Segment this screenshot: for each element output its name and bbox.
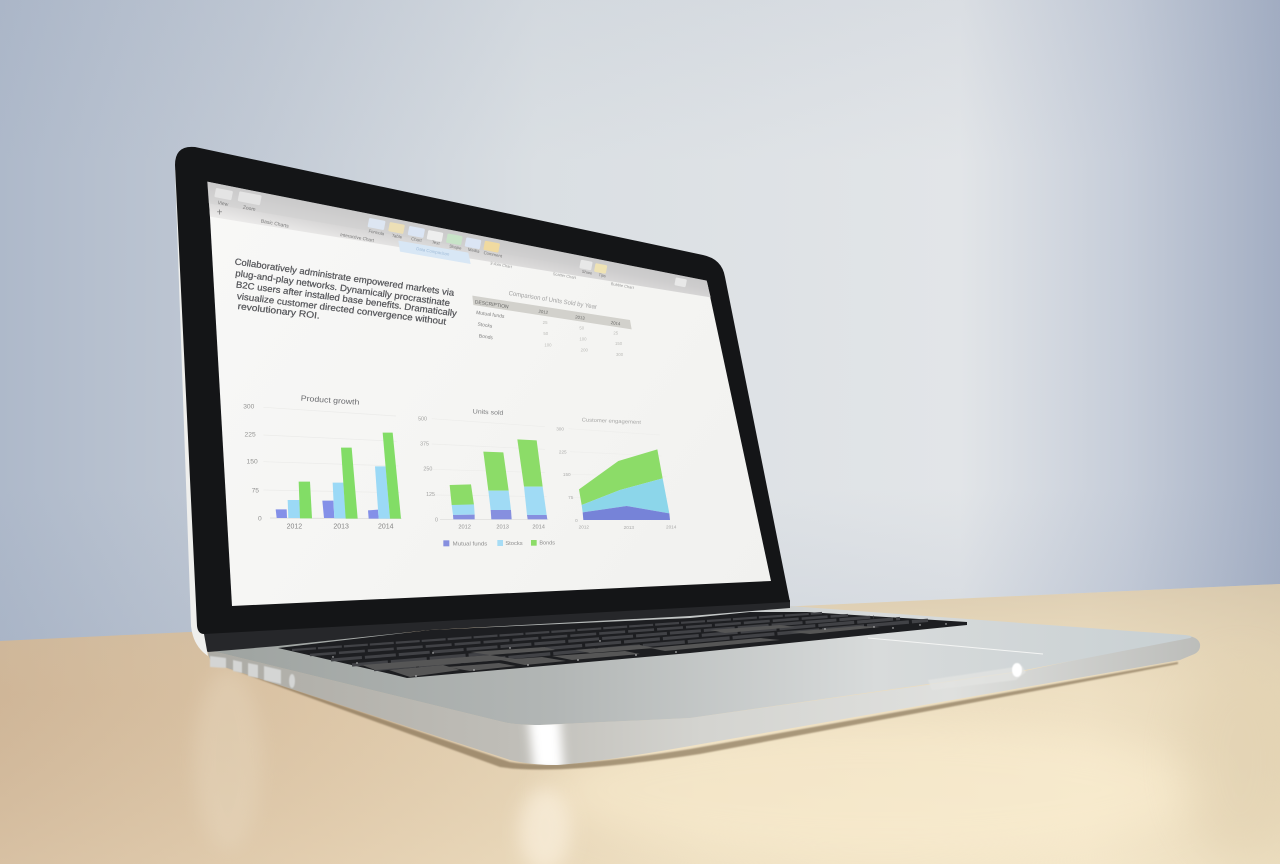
y axis labels: 125 <box>426 492 435 498</box>
key well <box>278 612 967 678</box>
toolbar labels: Zoom <box>242 205 256 213</box>
toolbar labels: Formula <box>368 228 385 236</box>
x axis labels: 2014 <box>378 524 394 531</box>
sheet tabs: Basic Charts <box>260 218 290 230</box>
table header labels: 2014 <box>611 320 621 326</box>
chart title: Units sold <box>473 408 504 417</box>
x axis labels: 2012 <box>458 525 471 531</box>
comparison table: 200 <box>581 347 588 352</box>
x axis labels: 2013 <box>333 524 349 531</box>
laptop <box>175 147 1200 772</box>
body paragraph: revolutionary ROI. <box>237 301 320 321</box>
hinge <box>200 600 790 652</box>
lid silver edge <box>175 170 208 656</box>
y axis labels: 225 <box>559 449 567 454</box>
body paragraph: plug-and-play networks. Dynamically procrastinate <box>235 268 451 308</box>
x axis labels: 2012 <box>579 524 589 529</box>
comparison table: 300 <box>616 352 624 357</box>
key glints <box>332 623 947 677</box>
bars <box>276 509 287 518</box>
toolbar labels: Media <box>467 247 481 254</box>
chart: Product growth <box>243 394 402 531</box>
comparison table: 100 <box>579 336 587 341</box>
toolbar labels <box>217 200 606 278</box>
sheet tabs: Bubble Chart <box>610 281 635 290</box>
keyboard <box>278 612 967 678</box>
y axis labels <box>556 427 578 523</box>
legend: Bonds <box>539 541 555 547</box>
key rows <box>292 613 928 670</box>
body paragraph: visualize customer directed convergence without <box>236 291 447 327</box>
legend: Stocks <box>505 541 523 547</box>
laptop base top deck <box>208 606 1192 725</box>
active sheet tab <box>398 241 471 264</box>
table header labels: 2012 <box>538 309 549 315</box>
stacked bars <box>450 484 474 505</box>
comparison table: 25 <box>543 320 548 325</box>
y axis labels: 250 <box>423 467 432 473</box>
y axis labels: 0 <box>575 518 578 523</box>
x axis labels: 2014 <box>666 525 677 530</box>
plus button: + <box>217 208 223 219</box>
sheet tabs: Data Comparison <box>416 246 450 257</box>
comparison table: 50 <box>543 331 549 336</box>
laptop base edge <box>208 636 1200 765</box>
comparison table <box>472 290 632 357</box>
table rows: Mutual funds <box>476 310 505 320</box>
screen <box>207 182 771 606</box>
sheet tabs: Interactive Chart <box>340 232 375 243</box>
charts <box>243 394 677 548</box>
comparison table: 100 <box>544 342 552 347</box>
table header band <box>472 296 632 329</box>
x axis labels: 2014 <box>532 525 545 531</box>
table header labels: 2013 <box>575 314 586 321</box>
body paragraph: B2C users after installed base benefits. Dramatically <box>235 279 458 318</box>
x axis labels: 2012 <box>287 524 302 531</box>
gridlines <box>263 407 402 519</box>
front keys <box>362 625 880 677</box>
trackpad highlight <box>868 638 1043 690</box>
legend: Mutual funds <box>453 542 487 548</box>
stacked areas <box>579 449 663 505</box>
y axis labels: 150 <box>247 459 258 466</box>
chart title: Customer engagement <box>582 417 642 426</box>
x axis labels <box>579 524 677 530</box>
y axis labels: 0 <box>435 517 438 523</box>
toolbar labels: Text <box>431 239 441 246</box>
table rows: Bonds <box>478 333 494 341</box>
y axis labels: 75 <box>252 487 259 494</box>
table title: Comparison of Units Sold by Year <box>508 290 597 311</box>
x axis labels <box>287 524 394 531</box>
x axis labels: 2013 <box>496 525 509 531</box>
comparison table: 50 <box>579 325 585 330</box>
body paragraph: Collaboratively administrate empowered markets via <box>234 256 455 298</box>
toolbar labels: Shape <box>449 243 463 251</box>
comparison table: 25 <box>613 331 619 336</box>
lid bezel <box>175 147 790 634</box>
toolbar buttons <box>214 188 687 287</box>
sheet tabs: 3-Axis Chart <box>490 260 513 269</box>
y axis labels: 375 <box>420 442 429 448</box>
background: wall <box>0 0 1280 650</box>
y axis labels <box>243 404 262 523</box>
chart: Units sold <box>418 408 555 548</box>
table header labels <box>474 299 621 326</box>
sheet tabs: Scatter Chart <box>552 271 577 280</box>
x axis labels <box>458 525 545 531</box>
sheet tabs <box>260 218 635 290</box>
table rows: Stocks <box>477 322 493 330</box>
chart title: Product growth <box>301 394 360 407</box>
y axis labels: 150 <box>563 472 571 477</box>
y axis labels: 300 <box>243 404 255 411</box>
toolbar labels: View <box>217 200 229 208</box>
background: wooden desk <box>0 584 1280 864</box>
front corner highlight <box>528 716 564 772</box>
table rows <box>476 310 505 341</box>
y axis labels: 225 <box>245 431 256 438</box>
y axis labels: 500 <box>418 417 427 423</box>
gridlines <box>568 429 668 498</box>
body paragraph <box>234 256 458 327</box>
table header labels: DESCRIPTION <box>474 299 509 310</box>
laptop shadow on desk <box>212 662 1178 770</box>
toolbar labels: Table <box>391 233 403 240</box>
ports on left side <box>210 656 295 688</box>
toolbar labels: Tips <box>598 272 606 278</box>
legend <box>443 540 555 548</box>
comparison table: 150 <box>615 341 623 346</box>
y axis labels <box>418 417 438 523</box>
screen background <box>208 182 771 606</box>
toolbar labels: Share <box>581 269 594 276</box>
x axis labels: 2013 <box>624 525 634 530</box>
toolbar labels: Chart <box>411 236 423 243</box>
y axis labels: 300 <box>556 427 564 432</box>
gridlines <box>432 419 548 519</box>
application toolbar <box>207 182 711 297</box>
y axis labels: 75 <box>568 495 574 500</box>
y axis labels: 0 <box>258 516 262 523</box>
toolbar labels: Comment <box>483 250 503 259</box>
chart: Customer engagement <box>556 417 677 530</box>
